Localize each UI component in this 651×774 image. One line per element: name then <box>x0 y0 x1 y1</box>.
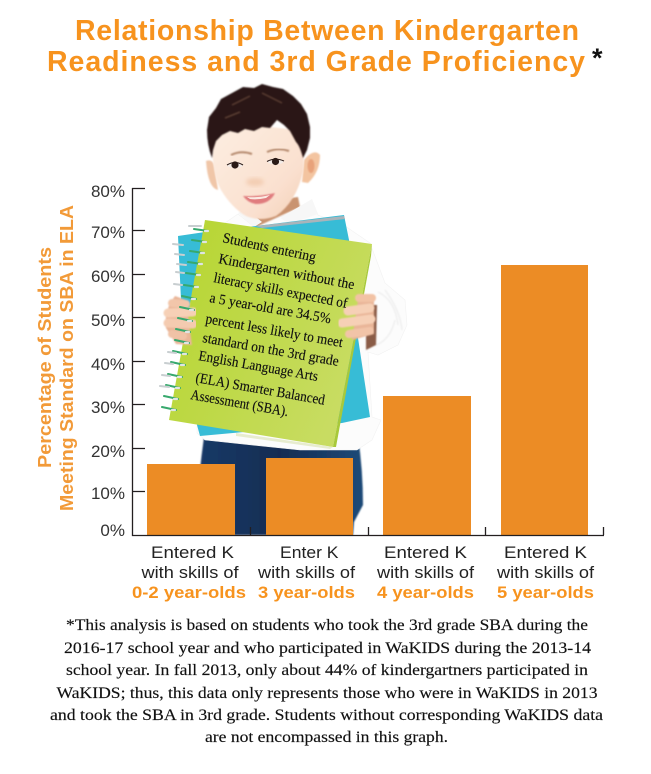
shirt cuff folds <box>376 290 402 345</box>
hair highlights <box>225 93 282 118</box>
bar: 4 year-olds <box>383 396 471 535</box>
y axis tick labels: 30% <box>91 398 125 417</box>
x label: 0-2 year-olds <box>132 543 246 602</box>
footnote: *This analysis is based on students who took the 3rd grade SBA during the <box>66 617 588 634</box>
y axis tick labels: 10% <box>91 484 125 503</box>
x label: 0-2 year-olds: 0-2 year-olds <box>132 583 246 602</box>
bar: 0-2 year-olds <box>147 464 235 535</box>
y axis tick labels: 70% <box>91 223 125 242</box>
x label: 4 year-olds: Entered K <box>384 543 468 562</box>
x label: 4 year-olds: 4 year-olds <box>377 583 474 602</box>
jeans <box>196 437 363 535</box>
y axis tick labels: 80% <box>91 182 125 201</box>
x label: 3 year-olds: 3 year-olds <box>258 583 355 602</box>
x label: 3 year-olds: Enter K <box>280 543 339 562</box>
mouth <box>243 193 275 204</box>
notebook spiral binding <box>160 226 208 410</box>
notebook caption: Students entering <box>221 230 317 266</box>
y axis tick labels: 60% <box>91 267 125 286</box>
notebook caption: (ELA) Smarter Balanced <box>194 370 327 409</box>
y axis tick labels <box>91 182 125 540</box>
green notebook <box>169 220 372 447</box>
x label: 5 year-olds: Entered K <box>504 543 588 562</box>
footnote <box>50 617 603 746</box>
x label: 5 year-olds: with skills of <box>496 563 594 582</box>
footnote: and took the SBA in 3rd grade. Students without corresponding WaKIDS data <box>50 707 603 724</box>
x label: 3 year-olds <box>257 543 355 602</box>
bar: 3 year-olds <box>266 458 353 535</box>
title: Readiness and 3rd Grade Proficiency <box>47 46 585 78</box>
y axis tick labels: 0% <box>100 521 125 540</box>
collar <box>238 199 318 227</box>
notebook caption: English Language Arts <box>197 348 320 385</box>
chart axes <box>132 188 604 536</box>
nose <box>246 178 264 186</box>
white shirt <box>197 200 407 450</box>
eyebrows <box>231 149 289 155</box>
footnote: 2016-17 school year and who participated in WaKIDS during the 2013-14 <box>64 640 591 657</box>
ears <box>206 160 218 190</box>
notebook caption: percent less likely to meet <box>204 311 344 351</box>
bar: 5 year-olds <box>501 265 588 535</box>
x label: 4 year-olds <box>376 543 474 602</box>
eyes <box>227 158 284 169</box>
neck <box>240 197 300 227</box>
x label: 5 year-olds <box>496 543 594 602</box>
footnote: are not encompassed in this graph. <box>205 729 448 746</box>
x label: 3 year-olds: with skills of <box>257 563 355 582</box>
right hand fingers <box>342 296 374 340</box>
y axis tick labels: 20% <box>91 442 125 461</box>
notebook caption: Kindergarten without the <box>217 251 356 293</box>
footnote: school year. In fall 2013, only about 44% of kindergartners participated in <box>66 662 588 679</box>
x label: 4 year-olds: with skills of <box>376 563 474 582</box>
y axis title: Percentage of Students <box>34 247 55 468</box>
y axis title: Meeting Standard on SBA in ELA <box>56 205 77 511</box>
notebook caption: Assessment (SBA). <box>189 387 290 420</box>
x label: 0-2 year-olds: with skills of <box>140 563 239 582</box>
footnote: WaKIDS; thus, this data only represents those who were in WaKIDS in 2013 <box>56 685 598 702</box>
face <box>212 122 304 219</box>
y axis tick labels: 40% <box>91 355 125 374</box>
y axis tick labels: 50% <box>91 311 125 330</box>
y axis title <box>34 205 77 511</box>
right wrist <box>366 305 377 350</box>
x label: 5 year-olds: 5 year-olds <box>497 583 594 602</box>
x label: 0-2 year-olds: Entered K <box>151 543 235 562</box>
notebook caption: standard on the 3rd grade <box>201 330 340 370</box>
notebook caption <box>189 230 356 420</box>
notebook caption: literacy skills expected of <box>212 270 349 312</box>
left hand fingers <box>166 296 193 345</box>
title <box>47 15 585 78</box>
hair <box>207 84 310 158</box>
photo: boy holding notebooks <box>160 84 407 535</box>
title: Relationship Between Kindergarten <box>75 15 579 47</box>
title asterisk: * <box>592 43 603 73</box>
blue notebook behind <box>178 215 370 436</box>
notebook caption: a 5 year-old are 34.5% <box>208 290 332 327</box>
